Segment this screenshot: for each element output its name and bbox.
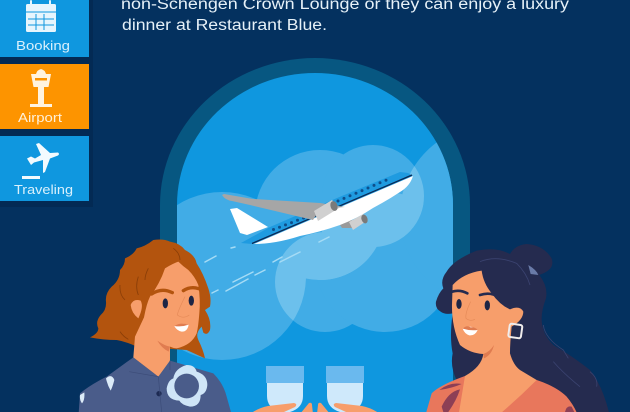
tile: Traveling — [0, 136, 89, 201]
nose — [177, 297, 189, 317]
dress folds — [439, 383, 462, 412]
cheat line — [252, 175, 412, 244]
dress — [425, 376, 578, 412]
flower emblem — [167, 365, 207, 407]
neck shadow — [483, 345, 494, 358]
eyes — [456, 299, 462, 309]
shirt pattern — [80, 376, 114, 403]
icon: calendar — [26, 1, 56, 32]
fuselage belly — [254, 176, 413, 244]
neck and face — [133, 262, 200, 377]
far engine — [338, 217, 356, 228]
icon: control tower — [30, 69, 52, 107]
sidebar shadow — [0, 0, 93, 207]
wing — [222, 194, 345, 220]
glass left — [266, 366, 304, 412]
eyes — [163, 298, 168, 308]
hands — [250, 403, 380, 412]
windows — [272, 179, 388, 231]
speed streaks — [205, 237, 329, 293]
hair strands — [120, 248, 180, 339]
collar lines — [129, 361, 170, 412]
fuselage top — [241, 172, 413, 244]
nose — [466, 302, 475, 320]
ear — [131, 300, 142, 318]
label: Traveling: Traveling — [14, 183, 73, 197]
window view: sky and clouds — [177, 73, 453, 412]
person: man with curly hair — [79, 239, 231, 412]
label: Airport: Airport — [18, 111, 63, 125]
icon: departing plane — [22, 143, 59, 179]
window frame — [160, 58, 470, 412]
eyebrows — [152, 288, 199, 294]
jaw shadow — [157, 341, 170, 352]
glass right — [326, 366, 364, 412]
mouth — [463, 327, 478, 335]
hair accent — [528, 265, 538, 275]
tile: Booking — [0, 0, 89, 57]
earring — [508, 324, 523, 338]
hair — [90, 239, 211, 358]
hair — [436, 244, 610, 412]
body text: dinner at Restaurant Blue. — [122, 17, 327, 34]
shirt button — [156, 391, 162, 396]
mouth — [174, 324, 189, 332]
label: Booking: Booking — [16, 39, 70, 53]
near engine — [314, 200, 339, 221]
body text — [121, 0, 569, 34]
face, neck and chest — [452, 271, 537, 412]
person: woman with dark hair — [425, 244, 610, 412]
eyebrows — [452, 291, 498, 297]
tile: Airport — [0, 64, 89, 129]
shirt — [79, 357, 231, 412]
hair strands — [480, 259, 597, 387]
tail fin — [230, 208, 268, 235]
airplane — [222, 172, 413, 244]
